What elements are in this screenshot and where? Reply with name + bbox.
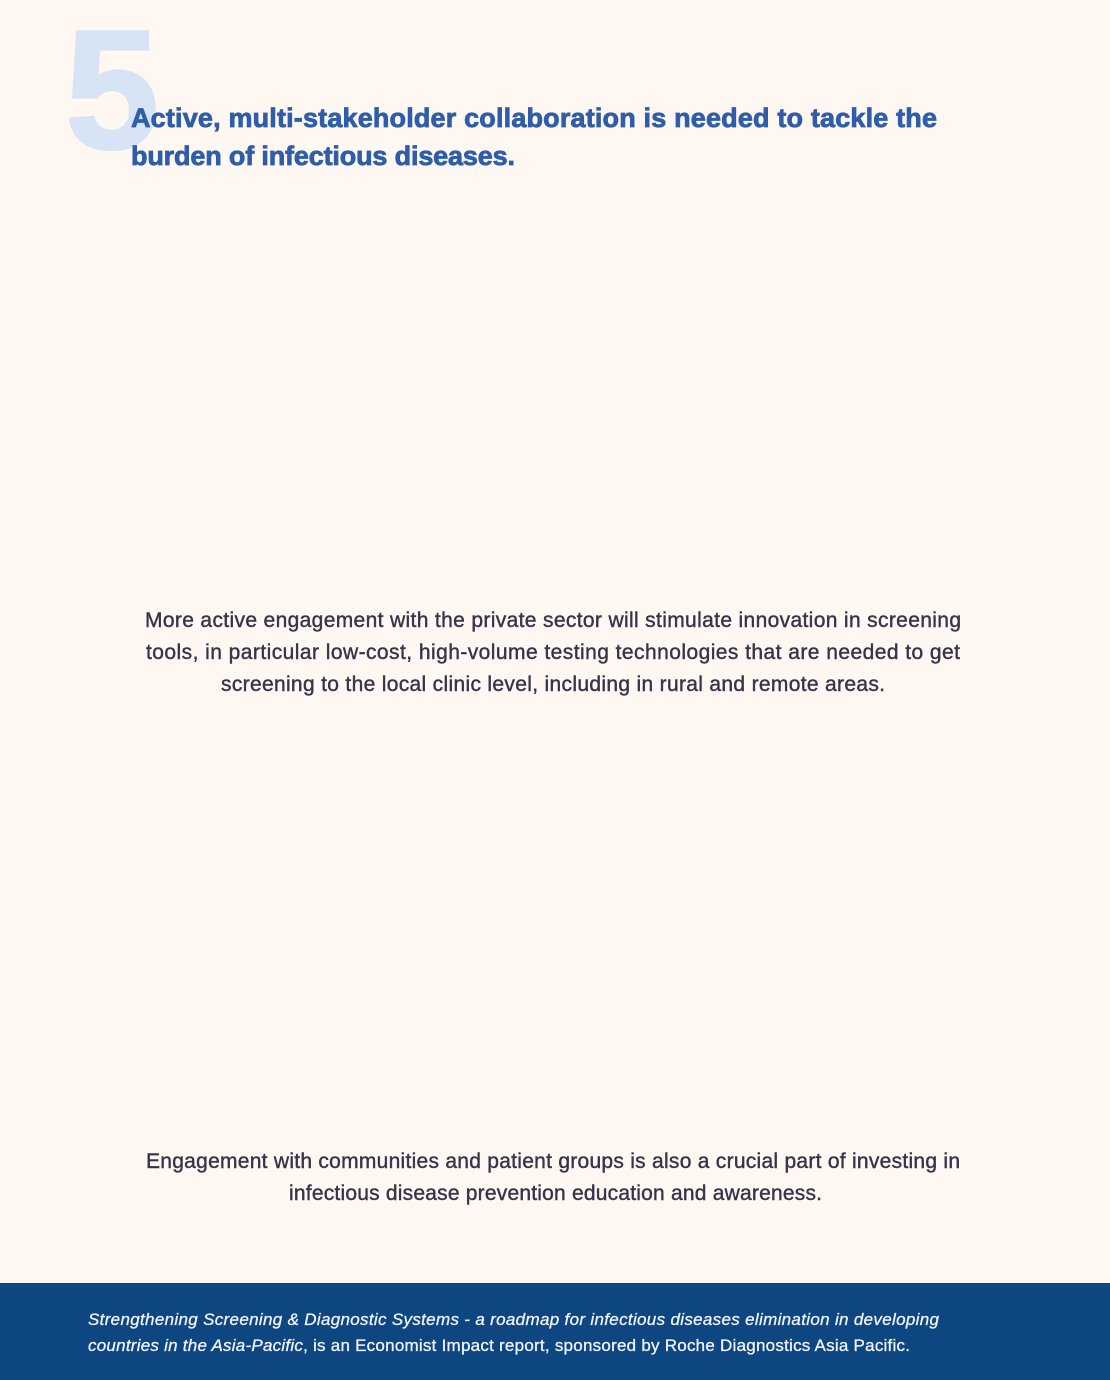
heading: burden of infectious diseases.: [131, 141, 515, 171]
text block: private sector engagement: [145, 609, 961, 696]
text block: private sector engagement: More active engagement with the private sector will stimulate innovation in screening: [145, 609, 961, 632]
footer text: [88, 1310, 940, 1355]
heading: [131, 103, 937, 171]
footer band: [0, 1283, 1110, 1380]
text block: private sector engagement: screening to the local clinic level, including in rural and remote areas.: [221, 673, 885, 696]
text block: private sector engagement: tools, in particular low-cost, high-volume testing technologies that are needed to get: [146, 641, 960, 664]
text block: community engagement: Engagement with communities and patient groups is also a crucial part of investing in: [146, 1150, 960, 1173]
footer text: Strengthening Screening & Diagnostic Systems - a roadmap for infectious diseases elimination in developing: [88, 1310, 940, 1329]
footer text: countries in the Asia-Pacific, is an Economist Impact report, sponsored by Roche Diagnostics Asia Pacific.: [88, 1336, 910, 1355]
text block: community engagement: infectious disease prevention education and awareness.: [289, 1182, 822, 1205]
text block: community engagement: [146, 1150, 960, 1205]
section number 5: 5: [65, 0, 159, 184]
heading: Active, multi-stakeholder collaboration is needed to tackle the: [131, 103, 937, 133]
